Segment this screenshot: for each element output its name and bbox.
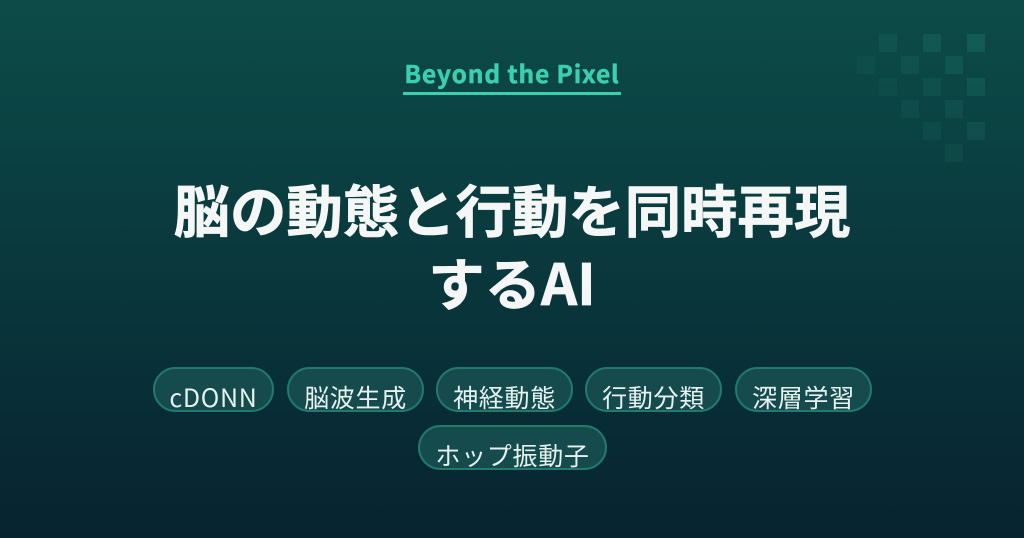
brand label: Beyond the Pixel: Beyond the Pixel (404, 56, 620, 91)
tag: cDONN (153, 367, 274, 412)
title (174, 168, 850, 322)
tag: 神経動態: 神経動態 (453, 379, 556, 415)
tag: 深層学習 (735, 367, 872, 412)
title: するAI (428, 241, 596, 322)
tag: ホップ振動子: ホップ振動子 (435, 437, 590, 473)
title: 脳の動態と行動を同時再現 (174, 168, 850, 249)
decorative pixel grid icon (879, 34, 985, 140)
tag: 神経動態 (436, 367, 573, 412)
tag: 脳波生成 (287, 367, 424, 412)
tag: ホップ振動子 (418, 425, 607, 470)
tag: 深層学習: 深層学習 (752, 379, 855, 415)
tag: 行動分類 (585, 367, 722, 412)
tag: 行動分類: 行動分類 (602, 379, 705, 415)
tag: cDONN: cDONN (169, 379, 258, 415)
tag: 脳波生成: 脳波生成 (304, 379, 407, 415)
